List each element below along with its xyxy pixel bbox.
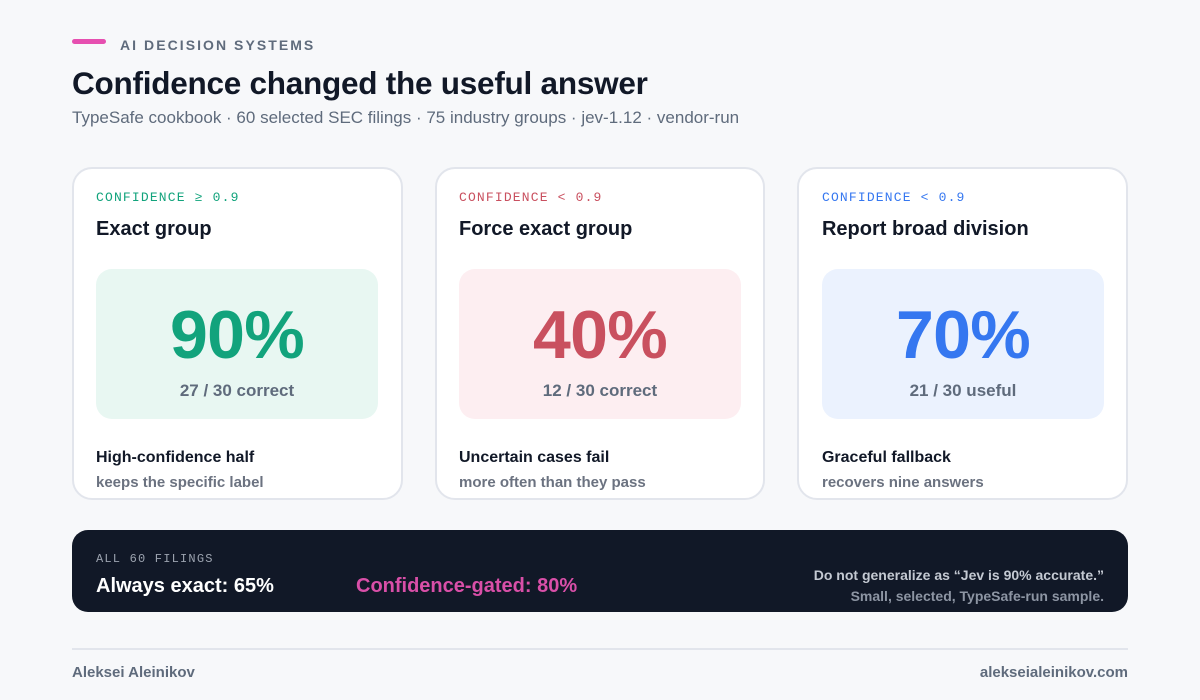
summary label: ALL 60 FILINGS <box>96 552 214 566</box>
note title: Graceful fallback <box>822 449 951 466</box>
accent bar <box>72 39 106 44</box>
note text: recovers nine answers <box>822 474 984 491</box>
stat box <box>96 269 378 419</box>
note text: more often than they pass <box>459 474 646 491</box>
big number: 90% <box>170 297 304 373</box>
title: Confidence changed the useful answer <box>72 65 648 101</box>
count: 21 / 30 useful <box>910 381 1016 400</box>
confidence-gated stat: Confidence-gated: 80% <box>356 575 577 597</box>
note text: keeps the specific label <box>96 474 264 491</box>
stat box <box>822 269 1104 419</box>
summary bar <box>72 530 1128 612</box>
note title: Uncertain cases fail <box>459 449 609 466</box>
count: 12 / 30 correct <box>543 381 657 400</box>
caveat: Do not generalize as “Jev is 90% accurate.” <box>814 567 1104 583</box>
eyebrow label: AI DECISION SYSTEMS <box>120 37 315 53</box>
stat box <box>459 269 741 419</box>
big number: 40% <box>533 297 667 373</box>
confidence tag: CONFIDENCE < 0.9 <box>459 190 603 205</box>
always exact stat: Always exact: 65% <box>96 575 274 597</box>
website: alekseialeinikov.com <box>980 664 1128 681</box>
card heading: Exact group <box>96 218 212 240</box>
note title: High-confidence half <box>96 449 254 466</box>
confidence tag: CONFIDENCE ≥ 0.9 <box>96 190 240 205</box>
confidence tag: CONFIDENCE < 0.9 <box>822 190 966 205</box>
panel: exact group <box>72 167 403 500</box>
subtitle: TypeSafe cookbook · 60 selected SEC filings · 75 industry groups · jev-1.12 · vendor-run <box>72 108 739 127</box>
caveat detail: Small, selected, TypeSafe-run sample. <box>851 588 1104 604</box>
big number: 70% <box>896 297 1030 373</box>
panel: force exact group <box>435 167 765 500</box>
author: Aleksei Aleinikov <box>72 664 195 681</box>
panel: report broad division <box>797 167 1128 500</box>
card heading: Force exact group <box>459 218 632 240</box>
card heading: Report broad division <box>822 218 1029 240</box>
count: 27 / 30 correct <box>180 381 294 400</box>
